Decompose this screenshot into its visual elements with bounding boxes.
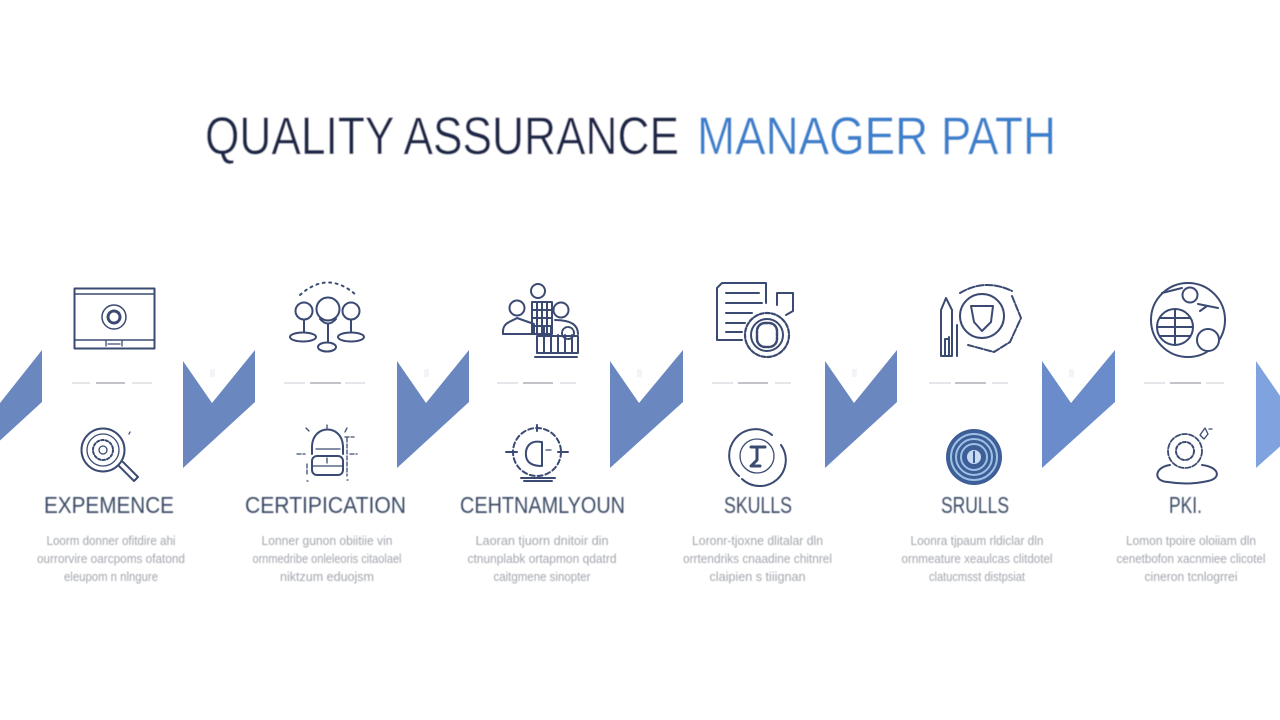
chevron arrow 4	[610, 350, 683, 468]
chevron arrow 7	[1256, 361, 1280, 468]
icon: backpack certificate	[297, 425, 357, 481]
icon: monitor with gear	[74, 288, 154, 348]
description	[37, 534, 185, 584]
description: orrtendriks cnaadine chitnrel	[683, 552, 832, 566]
icon: dashed target with head	[506, 425, 568, 481]
icon: team with chart	[503, 284, 578, 357]
panel: skills two	[902, 285, 1052, 584]
heading: EXPEMENCE	[44, 492, 174, 518]
description: Loorm donner ofitdire ahi	[46, 534, 176, 548]
description: eleupom n nlngure	[64, 570, 158, 584]
chevron arrow 2	[183, 350, 255, 468]
panel: experience	[37, 288, 185, 584]
description: Lonner gunon obiitiie vin	[262, 534, 393, 548]
chevron arrow 1	[0, 350, 42, 468]
divider	[284, 382, 365, 384]
description: ourrorvire oarcpoms ofatond	[37, 552, 185, 566]
chevron arrow 6	[1042, 350, 1115, 468]
icon: circular arrows	[729, 429, 786, 486]
panel: kpi	[1116, 283, 1266, 584]
icon: concentric badge	[946, 429, 1002, 485]
divider	[712, 382, 791, 384]
description	[468, 534, 617, 584]
description: ctnunplabk ortapmon qdatrd	[468, 552, 617, 566]
description: Laoran tjuorn dnitoir din	[476, 534, 609, 548]
faint ticks	[210, 369, 1074, 377]
divider	[929, 382, 1008, 384]
description	[252, 534, 402, 584]
description	[1116, 534, 1266, 584]
title: QUALITY ASSURANCE	[205, 107, 679, 166]
icon: document with gear	[717, 283, 793, 357]
description: caitgmene sinopter	[494, 570, 590, 584]
heading: SRULLS	[941, 492, 1009, 518]
heading: CEHTNAMLYOUN	[460, 492, 625, 518]
description: clatucmsst distpsiat	[929, 570, 1025, 584]
description: cenetbofon xacnmiee clicotel	[1116, 552, 1266, 566]
icon: globe	[1151, 283, 1225, 357]
description: ornmedribe onleleoris citaolael	[252, 552, 402, 566]
title: MANAGER PATH	[697, 107, 1056, 166]
panel: team qualification	[460, 284, 625, 584]
divider	[497, 382, 576, 384]
icon: gear and bottle	[941, 285, 1021, 356]
description: Loonra tjpaum rldiclar dln	[910, 534, 1044, 548]
description: niktzum eduojsm	[280, 570, 374, 584]
chevron arrow 3	[397, 350, 469, 468]
divider	[1144, 382, 1224, 384]
description: cineron tcnlogrrei	[1144, 570, 1238, 584]
panel: certification	[245, 282, 406, 584]
heading: PKI.	[1169, 492, 1202, 518]
heading: CERTIPICATION	[245, 492, 406, 518]
description: claipien s tiiignan	[710, 570, 806, 584]
heading: SKULLS	[724, 492, 792, 518]
panel: skills	[683, 283, 832, 584]
divider	[72, 382, 152, 384]
icon: magnifier with gear	[82, 428, 138, 481]
description: Lomon tpoire oloiiam dln	[1126, 534, 1256, 548]
description	[683, 534, 832, 584]
description: Loronr-tjoxne dlitalar dln	[692, 534, 823, 548]
chevron arrow 5	[825, 350, 897, 468]
description: ornmeature xeaulcas clitdotel	[902, 552, 1052, 566]
icon: group of people	[290, 282, 364, 352]
icon: gear on cloud	[1157, 428, 1217, 483]
title	[205, 107, 1056, 166]
description	[902, 534, 1052, 584]
